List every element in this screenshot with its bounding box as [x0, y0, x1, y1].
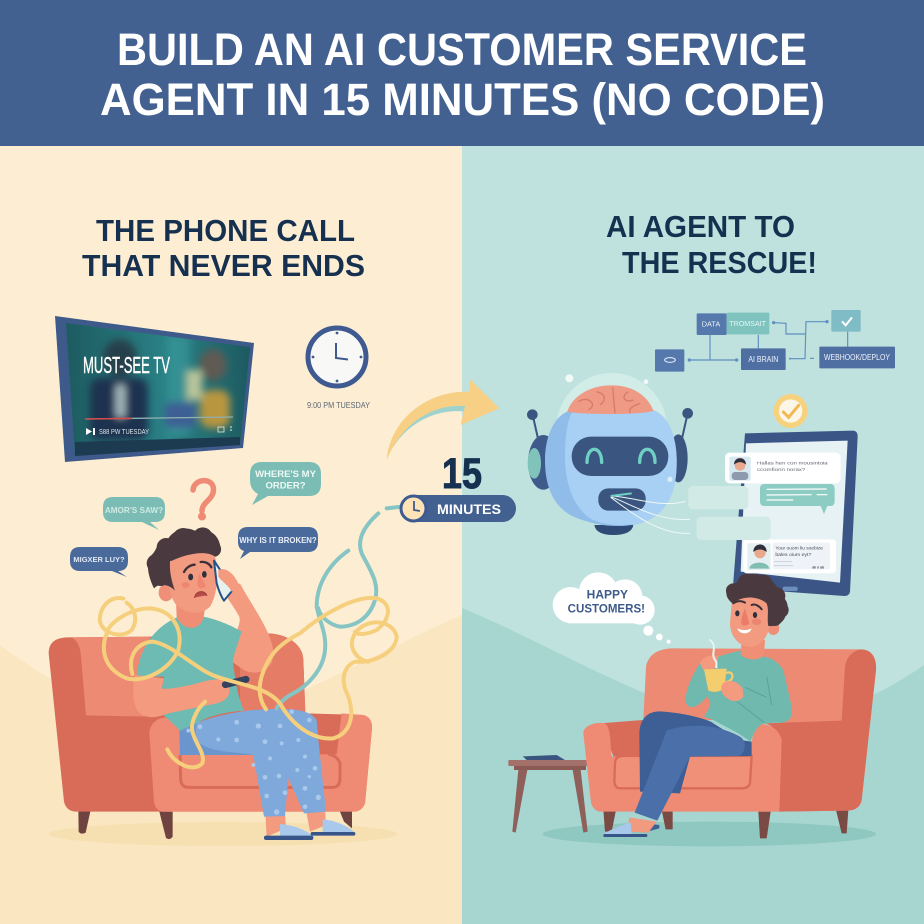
chat message one: [725, 453, 841, 483]
heading: the phone call that never ends: THE PHONE CALL: [96, 213, 355, 248]
minutes pill with timer icon: MINUTES: [437, 501, 501, 517]
chat message one: ccomfionn norax?: [757, 467, 806, 473]
thought cloud: CUSTOMERS!: [568, 601, 645, 615]
armchair: [583, 648, 876, 838]
side table with book: [508, 755, 591, 833]
progress bar: [85, 417, 233, 419]
robot head: [545, 410, 677, 526]
crossed jeans: [635, 711, 752, 821]
check node: [831, 310, 861, 332]
heading: the phone call that never ends: THAT NEVER ENDS: [82, 248, 365, 283]
exposed brain: [567, 385, 653, 414]
teal sweater: [685, 650, 792, 742]
TV control row: S88 PW TUESDAY: [99, 429, 149, 436]
database node: [655, 349, 684, 372]
title banner: BUILD AN AI CUSTOMER SERVICE: [117, 24, 807, 75]
neck: [176, 600, 206, 628]
steam: [710, 640, 717, 667]
title banner: AGENT IN 15 MINUTES (NO CODE): [100, 74, 825, 125]
speech bubble: why is it broken: [238, 527, 318, 559]
chat message three: ah n ab: [812, 566, 824, 570]
title banner: [0, 0, 924, 146]
data node: DATA: [702, 320, 720, 329]
illustration: stressed man on sofa: [49, 507, 402, 846]
speech bubble: teal question: AMOR'S SAW?: [105, 506, 163, 515]
heading: AI agent to the rescue: THE RESCUE!: [622, 245, 817, 280]
minutes pill with timer icon: [400, 495, 516, 522]
arrow from problem to solution: [387, 379, 499, 460]
icon: question mark: [193, 481, 214, 520]
speech bubble: where's my order: [250, 462, 321, 505]
left headphone: [528, 435, 559, 490]
AI brain node: [741, 348, 786, 370]
webhook/deploy node: [819, 347, 895, 368]
pyjama trousers: [179, 709, 326, 817]
big number 15: 15: [442, 450, 482, 498]
television showing must-see TV: [55, 316, 254, 462]
chat message one: Hallas hen con mousintoia: [757, 460, 828, 466]
glowing dot: [667, 477, 673, 482]
heading: the phone call that never ends: [82, 213, 365, 283]
transform node: TROMSAIT: [729, 319, 766, 328]
webhook/deploy node: WEBHOOK/DEPLOY: [824, 353, 891, 362]
chat message three: [743, 539, 836, 573]
chat message three: bales oium eyt?: [775, 552, 812, 557]
illustration: relaxed man on sofa: [508, 572, 876, 846]
illustration: robot with brain: [528, 373, 771, 540]
voice streams: [611, 496, 690, 533]
teal tangled cord: [277, 507, 402, 708]
shoe and foot: [603, 817, 659, 837]
check badge: [774, 394, 808, 428]
neck and head: [726, 574, 789, 659]
speech bubble: blue question: [70, 547, 128, 577]
tablet screen: [741, 441, 848, 583]
speech bubble: where's my order: WHERE'S MY: [255, 469, 317, 480]
right headphone: [669, 434, 688, 482]
TV headline: MUST-SEE TV: [83, 352, 170, 378]
AI brain node: AI BRAIN: [748, 355, 779, 364]
illustration: tablet with chat: [725, 394, 858, 596]
panel: left cream background: [0, 146, 462, 924]
chat message three: Your ouom liu soebize: [775, 546, 824, 551]
clock caption: 9:00 PM TUESDAY: [307, 400, 370, 410]
phone and hand: [214, 561, 241, 601]
slippers and feet: [264, 810, 355, 840]
glass dome: [556, 373, 667, 484]
armchair: [49, 633, 372, 839]
workflow diagram: [655, 310, 895, 372]
connector lines: [688, 322, 848, 360]
floor shadow: [543, 822, 876, 846]
head: [147, 527, 221, 613]
heading: AI agent to the rescue: AI AGENT TO: [606, 209, 795, 244]
thought cloud: HAPPY: [587, 587, 628, 601]
hair: [147, 527, 221, 591]
forearm holding remote: [133, 675, 230, 717]
thought cloud: [553, 572, 671, 644]
yellow tangled cord: [100, 598, 397, 767]
heading: AI agent to the rescue: [606, 209, 817, 280]
pale floating bubbles: [688, 486, 771, 540]
speech bubble: blue question: MIGXER LUY?: [73, 555, 125, 564]
speech bubble: teal question: [103, 497, 165, 530]
data node: [697, 313, 727, 335]
speech bubble: where's my order: ORDER?: [265, 480, 306, 492]
transform node: [727, 313, 769, 334]
TV remote: [225, 679, 246, 685]
wall clock: [308, 328, 366, 386]
coffee mug and hands: [700, 640, 743, 701]
TV control row: [86, 426, 232, 436]
sparkle dots: [565, 374, 648, 384]
floor shadow: [49, 822, 397, 846]
chat reply: [760, 484, 835, 514]
mouth: [598, 488, 646, 511]
speech bubble: why is it broken: WHY IS IT BROKEN?: [239, 536, 317, 545]
t-shirt: [137, 617, 244, 731]
antennae: [528, 409, 692, 440]
neck base: [594, 525, 633, 535]
tablet frame: [733, 431, 858, 596]
visor with smiling eyes: [572, 437, 668, 476]
raised arm: [223, 583, 273, 673]
panel: right teal background: [462, 146, 924, 924]
hair: [726, 574, 789, 626]
